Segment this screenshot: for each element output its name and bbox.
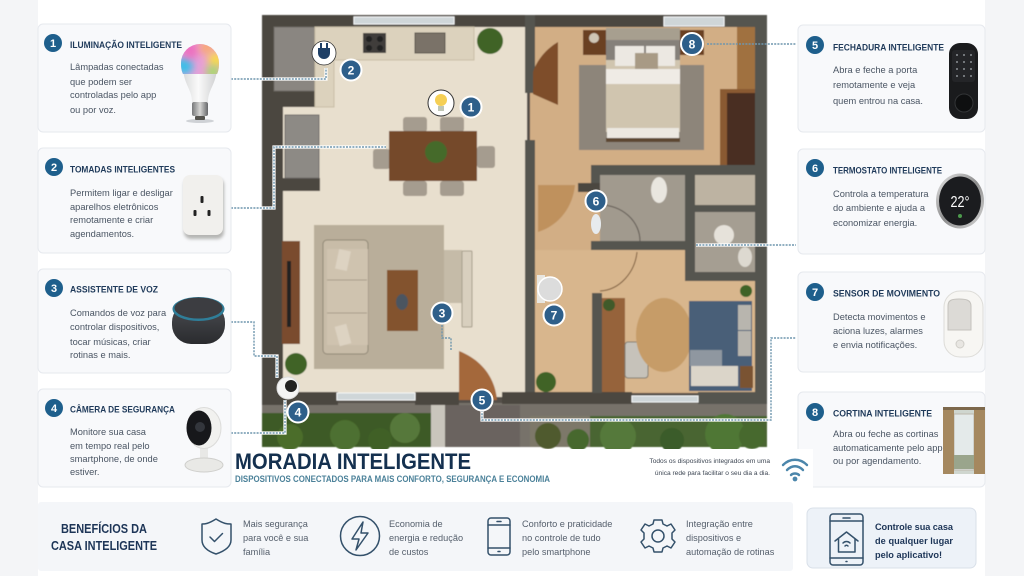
living rug: [314, 225, 444, 369]
icon: smart socket: [183, 175, 224, 239]
marker: sensor: [537, 275, 562, 303]
plan badge 2: 2: [348, 64, 355, 78]
panel: assistente de voz: tocar músicas, criar: [70, 337, 151, 347]
floor plan: [262, 15, 767, 454]
panel: tomadas inteligentes: 2: [51, 162, 57, 174]
icon: phone with house: [830, 514, 863, 565]
title band: [232, 449, 813, 493]
network note: única rede para facilitar o seu dia a dia.: [655, 470, 770, 477]
garden plants: [277, 413, 765, 454]
panel: câmera de segurança: Monitore sua casa: [70, 427, 147, 437]
benefit: conforto: Conforto e praticidade: [522, 519, 612, 529]
entry door: [459, 351, 497, 400]
plan badge 8: 8: [689, 38, 696, 52]
panel: iluminação inteligente: ILUMINAÇÃO INTELIGENTE: [70, 39, 182, 50]
icon: gear: [641, 520, 675, 552]
panel: assistente de voz: ASSISTENTE DE VOZ: [70, 284, 158, 294]
panel: sensor de movimento: e envia notificações.: [833, 340, 917, 350]
plant: living: [285, 353, 307, 375]
panel: câmera de segurança: 4: [51, 403, 58, 415]
panel: fechadura inteligente: remotamente e veja: [833, 80, 916, 90]
benefit: segurança: [243, 519, 309, 557]
plan badge 8: [681, 33, 703, 55]
kitchen: fridge: [274, 27, 315, 91]
benefit: segurança: para você e sua: [243, 533, 309, 543]
desk: [602, 298, 625, 392]
panel: tomadas inteligentes: aparelhos eletrônicos: [70, 202, 159, 212]
plan badge 4: [288, 402, 308, 422]
outer exterior base: [262, 15, 767, 447]
walls: [262, 15, 767, 405]
panel: termostato inteligente: [798, 149, 985, 254]
bedroom rug: [579, 65, 704, 150]
floor: kitchen and living: [275, 27, 527, 397]
panel: tomadas inteligentes: [38, 148, 231, 253]
panel: sensor de movimento: aciona luzes, alarmes: [833, 326, 923, 336]
panel: assistente de voz: rotinas e mais.: [70, 350, 130, 360]
panel: câmera de segurança: em tempo real pelo: [70, 441, 150, 451]
benefits heading: CASA INTELIGENTE: [51, 539, 157, 553]
panel: sensor de movimento: SENSOR DE MOVIMENTO: [833, 288, 940, 298]
panel: cortina inteligente: Abra ou feche as cortinas: [833, 429, 939, 439]
benefits heading: [51, 521, 157, 553]
panel: sensor de movimento: [798, 272, 985, 372]
panel: assistente de voz: controlar dispositivos,: [70, 322, 159, 332]
panel: termostato inteligente: economizar energia.: [833, 218, 917, 228]
callout text: de qualquer lugar: [875, 536, 953, 546]
panel: tomadas inteligentes: remotamente e criar: [70, 215, 153, 225]
double bed: [606, 28, 680, 142]
icon: smartphone: [488, 518, 510, 555]
plan badge 6: 6: [593, 194, 600, 208]
panel: fechadura inteligente: quem entrou na casa.: [833, 96, 923, 106]
icon: curtain window: [943, 407, 985, 474]
callout: aplicativo: [807, 508, 976, 568]
panel: tomadas inteligentes: TOMADAS INTELIGENTES: [70, 164, 175, 174]
plan badge 3: 3: [439, 306, 446, 320]
subtitle: DISPOSITIVOS CONECTADOS PARA MAIS CONFORTO, SEGURANÇA E ECONOMIA: [235, 474, 550, 485]
network note: [649, 458, 770, 477]
benefit: economia: energia e redução: [389, 533, 463, 543]
connector: card 3 to speaker: [231, 322, 277, 378]
panel: termostato inteligente: TERMOSTATO INTELIGENTE: [833, 164, 942, 176]
panel: fechadura inteligente: 5: [812, 40, 818, 52]
benefit: integração: [686, 519, 775, 557]
panel: termostato inteligente: Controla a temperatura: [833, 189, 929, 199]
panel: benefícios: [38, 502, 793, 571]
panel: câmera de segurança: estiver.: [70, 467, 99, 477]
plan badge 2: [340, 60, 362, 80]
coffee table: [387, 270, 418, 331]
plan badge 1: 1: [468, 100, 475, 114]
panel: cortina inteligente: [798, 392, 985, 487]
panel: cortina inteligente: automaticamente pelo app: [833, 443, 943, 453]
icon: shield: [202, 519, 231, 554]
closet niche: [695, 175, 755, 205]
panel: iluminação inteligente: controladas pelo app: [70, 90, 156, 100]
panel: cortina inteligente: 8: [812, 407, 818, 419]
benefit: conforto: pelo smartphone: [522, 547, 590, 557]
round rug: [636, 298, 692, 372]
floor: wood rooms: [530, 27, 756, 393]
icon: thermostat: [936, 174, 984, 228]
bathroom 1: [600, 175, 685, 241]
panel: tomadas inteligentes: Permitem ligar e desligar: [70, 188, 173, 198]
plant: kitchen: [477, 28, 503, 54]
plants: rooms: [536, 285, 752, 392]
panel: iluminação inteligente: ou por voz.: [70, 105, 116, 115]
benefits heading: BENEFÍCIOS DA: [61, 521, 147, 536]
connector: card 2 to table: [231, 147, 386, 208]
plan badge 7: 7: [551, 308, 558, 322]
plan badge 6: [586, 190, 606, 212]
plan badge 7: [544, 304, 564, 326]
marker: camera: [277, 377, 299, 399]
plan badge 4: 4: [295, 406, 302, 420]
shelf and wardrobe: [720, 27, 755, 165]
icon: smart speaker: [172, 297, 225, 344]
kitchen: counter: [315, 27, 474, 107]
panel: câmera de segurança: [38, 389, 231, 487]
panel: iluminação inteligente: [38, 24, 231, 132]
tv unit: [282, 241, 300, 344]
plan badge 5: 5: [479, 394, 486, 408]
sofa: main: [323, 240, 368, 354]
icon: energy: [340, 516, 380, 556]
benefit: economia: Economia de: [389, 519, 443, 529]
panel: fechadura inteligente: Abra e feche a porta: [833, 65, 918, 75]
panel: assistente de voz: [38, 269, 231, 373]
icon: smart bulb: [181, 44, 219, 123]
benefit: economia: de custos: [389, 547, 429, 557]
panel: iluminação inteligente: Lâmpadas conectadas: [70, 62, 164, 72]
panel: fechadura inteligente: FECHADURA INTELIGENTE: [833, 42, 944, 52]
callout text: pelo aplicativo!: [875, 550, 942, 560]
icon: thermostat: 22°: [950, 194, 970, 211]
connector: card 1 to plug: [231, 68, 326, 79]
connector: lock to card 7: [482, 338, 796, 420]
benefit: integração: dispositivos e: [686, 533, 741, 543]
desk chair: [625, 342, 648, 378]
benefit: segurança: Mais segurança: [243, 519, 309, 529]
panel: câmera de segurança: CÂMERA DE SEGURANÇA: [70, 404, 175, 414]
panel: assistente de voz: Comandos de voz para: [70, 308, 167, 318]
marker: sink bath: [591, 214, 601, 234]
panel: tomadas inteligentes: agendamentos.: [70, 229, 134, 239]
title: MORADIA INTELIGENTE: [235, 449, 471, 474]
bedroom door: [533, 42, 558, 105]
kitchen: sink: [415, 33, 445, 53]
sofa: grey bench: [285, 115, 319, 178]
panel: câmera de segurança: smartphone, de onde: [70, 454, 158, 464]
plan badge 5: [472, 390, 492, 410]
dining table with chairs: [373, 117, 495, 196]
benefit: integração: Integração entre: [686, 519, 753, 529]
panel: iluminação inteligente: 1: [50, 38, 56, 50]
benefit: conforto: no controle de tudo: [522, 533, 601, 543]
marker: bulb: [428, 90, 454, 116]
exterior ground: [262, 403, 767, 447]
panel: fechadura inteligente: [798, 25, 985, 132]
network note: Todos os dispositivos integrados em uma: [649, 458, 770, 465]
panel: sensor de movimento: Detecta movimentos e: [833, 312, 926, 322]
panel: cortina inteligente: CORTINA INTELIGENTE: [833, 408, 932, 418]
connector: card 4 to camera: [231, 400, 285, 433]
icon: wifi: [783, 460, 807, 480]
kitchen: stove: [363, 33, 386, 53]
connector: card 6: [696, 243, 796, 247]
single bed: [689, 301, 753, 391]
nightstands: [583, 30, 704, 55]
icon: security camera: [185, 408, 223, 472]
callout text: Controle sua casa: [875, 522, 954, 532]
panel: termostato inteligente: 6: [812, 163, 818, 175]
panel: assistente de voz: 3: [51, 283, 57, 295]
icon: smart lock: [949, 43, 978, 119]
windows: [337, 17, 724, 402]
benefit: economia: [389, 519, 463, 557]
bath door: [538, 185, 575, 232]
icon: motion sensor: [944, 291, 983, 357]
callout text: [875, 522, 954, 560]
bathroom 2: [695, 212, 755, 272]
marker: plug: [312, 41, 336, 65]
benefit: integração: automação de rotinas: [686, 547, 775, 557]
panel: sensor de movimento: 7: [812, 287, 818, 299]
plan badge 1: [460, 96, 482, 118]
hall arc: [600, 252, 637, 291]
benefit: conforto: [522, 519, 612, 557]
side sofa: [444, 250, 472, 327]
connector: card 8: [707, 43, 796, 45]
panel: cortina inteligente: ou por agendamento.: [833, 456, 921, 466]
panel: iluminação inteligente: que podem ser: [70, 77, 132, 87]
benefit: segurança: família: [243, 547, 271, 557]
connector: badge 3 stub: [442, 325, 451, 350]
panel: termostato inteligente: do ambiente e ajuda a: [833, 203, 926, 213]
plan badge 3: [432, 302, 452, 324]
